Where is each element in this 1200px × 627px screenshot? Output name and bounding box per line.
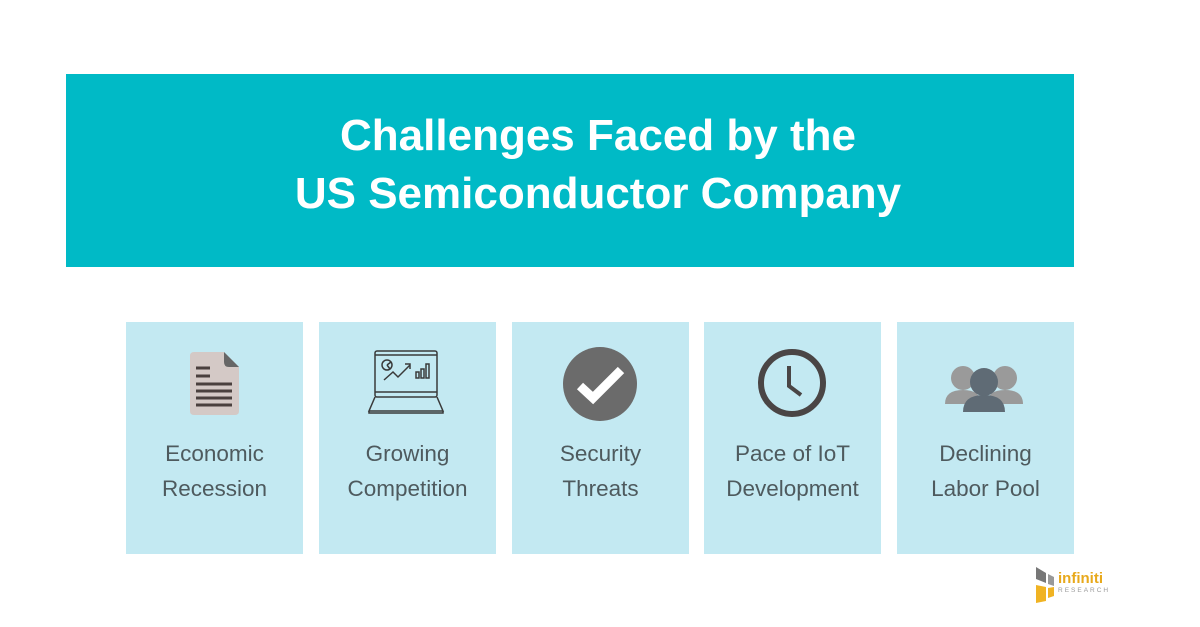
title: US Semiconductor Company: [295, 169, 901, 218]
card: growing competition: [319, 322, 496, 554]
card: declining labor pool: [897, 322, 1074, 554]
title: [295, 111, 901, 218]
card: economic recession: [126, 322, 303, 554]
label: Development: [726, 476, 859, 501]
label: [162, 441, 267, 501]
label: Threats: [562, 476, 639, 501]
label: [347, 441, 468, 501]
label: Growing: [366, 441, 449, 466]
logo: RESEARCH: [1058, 587, 1110, 594]
card: pace of iot: [704, 322, 881, 554]
icon: document: [190, 352, 239, 415]
label: Pace of IoT: [735, 441, 850, 466]
icon: check circle: [563, 347, 637, 421]
icon: people: [945, 366, 1023, 412]
logo: [1036, 567, 1110, 603]
label: [726, 441, 859, 501]
label: [560, 441, 641, 501]
label: [931, 441, 1040, 501]
label: Competition: [347, 476, 468, 501]
title banner: [66, 74, 1074, 267]
label: Recession: [162, 476, 267, 501]
icon: clock: [758, 349, 826, 417]
label: Labor Pool: [931, 476, 1040, 501]
card: security threats: [512, 322, 689, 554]
logo: infiniti: [1058, 570, 1103, 587]
label: Security: [560, 441, 641, 466]
title: Challenges Faced by the: [340, 111, 856, 160]
label: Economic: [165, 441, 264, 466]
icon: laptop chart: [368, 350, 444, 414]
label: Declining: [939, 441, 1032, 466]
